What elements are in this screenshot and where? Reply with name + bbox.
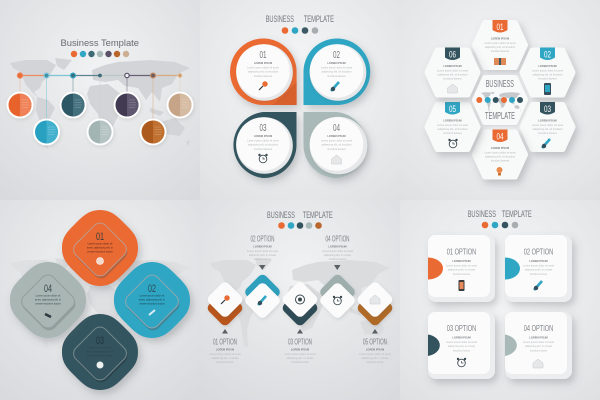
hexagon 02: Lorem ipsum dolor sit amet xyxy=(532,68,563,72)
colour dots xyxy=(482,222,518,228)
quadrant 02 xyxy=(304,38,370,105)
quadrant 04: Lorem ipsum dolor sit amet xyxy=(321,138,352,142)
card 04: adipiscing elit, in ornare xyxy=(525,344,553,348)
option 05: Lorem ipsum dolor sit amet xyxy=(359,352,391,356)
quadrant 03: 03 xyxy=(260,123,267,134)
panel: options background xyxy=(200,200,400,400)
diamond 03: Lorem ipsum dolor sit xyxy=(88,346,113,350)
card 01: tincidunt luctus xyxy=(453,272,471,276)
panel: quadrant infographic xyxy=(230,14,370,178)
hexagon 06: 06 xyxy=(449,50,456,60)
card 03: 03 OPTION xyxy=(447,324,476,333)
hexagon 01: tincidunt laoreet xyxy=(491,49,509,53)
hexagon 04: adipiscing elit, sit tincidunt xyxy=(485,154,515,158)
hexagon 05: tincidunt laoreet xyxy=(443,131,462,135)
quadrant 03 xyxy=(233,112,296,178)
quadrant 01: adipiscing elit, sit tincidunt xyxy=(248,70,278,74)
card 04: 04 OPTION xyxy=(524,324,553,333)
option 04: LOREM IPSUM xyxy=(328,244,347,248)
title: TEMPLATE xyxy=(304,14,334,25)
timeline line with nodes xyxy=(17,73,182,120)
colour dots xyxy=(278,222,322,229)
quadrant 01: tincidunt laoreet xyxy=(254,74,272,78)
quadrant 04: tincidunt laoreet xyxy=(327,147,346,151)
card 01: LOREM IPSUM xyxy=(452,259,471,263)
option 04: 04 OPTION xyxy=(326,234,350,244)
diamond 04: 04 xyxy=(44,283,52,295)
card 02: tincidunt luctus xyxy=(530,272,548,276)
diamond 04: amet, adipiscing elit, in xyxy=(35,298,62,302)
option 03: tincidunt luctus xyxy=(291,360,309,364)
quadrant 04: LOREM IPSUM xyxy=(327,134,346,138)
panel: rounded diamonds infographic xyxy=(10,210,190,390)
panel: timeline background xyxy=(0,0,200,200)
quadrant 01: LOREM IPSUM xyxy=(254,61,272,65)
card 02: Lorem ipsum dolor sit amet xyxy=(523,264,554,268)
quadrant 04: adipiscing elit, sit tincidunt xyxy=(322,142,352,146)
quadrant 02: 02 xyxy=(333,50,340,61)
option 03: 03 OPTION xyxy=(288,338,312,346)
world map xyxy=(210,258,390,348)
hexagon 04 xyxy=(475,130,525,176)
colour dots xyxy=(71,51,129,57)
hexagon 05: LOREM IPSUM xyxy=(443,118,462,122)
diamond 02: ornare tincidunt luctus xyxy=(139,302,165,306)
option 04: adipiscing elit, in ornare xyxy=(324,253,352,257)
diamond 03: amet, adipiscing elit, in xyxy=(87,350,114,354)
option 05: 05 OPTION xyxy=(363,338,387,346)
option 04: Lorem ipsum dolor sit amet xyxy=(322,249,353,253)
card 02: LOREM IPSUM xyxy=(529,259,548,263)
diamond 02: 02 xyxy=(148,283,156,295)
title: BUSINESS xyxy=(468,209,496,220)
hexagon 06: adipiscing elit, sit tincidunt xyxy=(438,72,468,76)
hexagon 01: Lorem ipsum dolor sit amet xyxy=(484,41,516,45)
world map xyxy=(10,58,190,148)
option 05: LOREM IPSUM xyxy=(366,348,384,352)
option 02: 02 OPTION xyxy=(250,234,275,244)
card 04: Lorem ipsum dolor sit amet xyxy=(523,340,554,344)
panel: hexagon background xyxy=(400,0,600,200)
panel: options infographic xyxy=(206,210,394,364)
hexagon 05: adipiscing elit, sit tincidunt xyxy=(438,127,468,131)
quadrant 02: adipiscing elit, sit tincidunt xyxy=(322,70,352,74)
hexagon 03: tincidunt laoreet xyxy=(538,131,557,135)
hexagon 01: 01 xyxy=(496,22,504,32)
hexagon 01: adipiscing elit, sit tincidunt xyxy=(485,45,515,49)
option 01: LOREM IPSUM xyxy=(216,348,234,352)
card 02 xyxy=(505,235,572,302)
hexagon 03: adipiscing elit, sit tincidunt xyxy=(532,127,563,131)
quadrant 04: 04 xyxy=(333,123,340,134)
diamond 03: 03 xyxy=(96,335,104,347)
diamond 03 xyxy=(62,314,138,390)
quadrant 01 xyxy=(230,38,297,105)
option 03: adipiscing elit, in ornare xyxy=(286,356,314,360)
option 02: LOREM IPSUM xyxy=(253,244,272,248)
hexagon 05: 05 xyxy=(449,104,456,114)
option 04: tincidunt luctus xyxy=(329,257,347,261)
hexagon 05: Lorem ipsum dolor sit amet xyxy=(437,123,468,127)
panel: option cards infographic xyxy=(428,209,572,379)
option 02: Lorem ipsum dolor sit amet xyxy=(247,249,278,253)
hexagon 02: adipiscing elit, sit tincidunt xyxy=(532,72,563,76)
panel: diamonds background xyxy=(0,200,200,400)
diamond 02 xyxy=(114,262,190,338)
centre hexagon: TEMPLATE xyxy=(485,111,515,122)
hexagon 03 xyxy=(522,102,572,149)
card 03 xyxy=(428,312,495,379)
hexagon 03: 03 xyxy=(544,104,551,114)
diamond 01: ornare tincidunt luctus xyxy=(87,250,113,254)
hexagon 03: LOREM IPSUM xyxy=(538,118,557,122)
hexagon 01 xyxy=(475,20,525,67)
quadrant 02: LOREM IPSUM xyxy=(327,61,346,65)
card 03: tincidunt luctus xyxy=(453,348,471,352)
quadrant 01: 01 xyxy=(260,50,267,61)
world map xyxy=(10,258,190,348)
card 01 xyxy=(428,235,495,302)
card 02: adipiscing elit, in ornare xyxy=(525,268,553,272)
diamond 04: ornare tincidunt luctus xyxy=(35,302,61,306)
quadrant 03: tincidunt laoreet xyxy=(254,147,272,151)
title: Business Template xyxy=(60,38,139,49)
hexagon 04: 04 xyxy=(496,132,504,142)
hexagon 04: Lorem ipsum dolor sit amet xyxy=(484,150,516,154)
hexagon 04: LOREM IPSUM xyxy=(491,146,509,150)
hexagon 04: tincidunt laoreet xyxy=(491,158,509,162)
hexagon 02: tincidunt laoreet xyxy=(538,76,557,80)
timeline circles xyxy=(6,92,194,146)
diamond 04 xyxy=(10,262,86,338)
panel: timeline infographic xyxy=(6,38,194,148)
quadrant 02: Lorem ipsum dolor sit amet xyxy=(321,66,352,70)
option 03: LOREM IPSUM xyxy=(291,348,309,352)
option 02: tincidunt luctus xyxy=(254,257,272,261)
centre hexagon: BUSINESS xyxy=(486,79,514,90)
card 03: LOREM IPSUM xyxy=(452,336,471,340)
card 01: Lorem ipsum dolor sit amet xyxy=(446,264,477,268)
option 04 xyxy=(318,234,357,320)
diamond 01: amet, adipiscing elit, in xyxy=(87,246,114,250)
option 01: 01 OPTION xyxy=(213,338,237,346)
diamond 01 xyxy=(62,210,138,286)
title: TEMPLATE xyxy=(303,210,333,221)
card 04: tincidunt luctus xyxy=(530,348,548,352)
option 03 xyxy=(281,280,319,364)
hexagon 02 xyxy=(522,48,572,95)
title: TEMPLATE xyxy=(502,209,532,220)
hexagon 02: LOREM IPSUM xyxy=(538,64,557,68)
title: BUSINESS xyxy=(267,210,295,221)
quadrant 03: adipiscing elit, sit tincidunt xyxy=(248,142,278,146)
option 01: tincidunt luctus xyxy=(216,360,234,364)
option 05: tincidunt luctus xyxy=(366,360,384,364)
option 02 xyxy=(243,234,282,320)
diamond 04: Lorem ipsum dolor sit xyxy=(36,294,61,298)
centre hexagon xyxy=(475,78,525,122)
quadrant 03: LOREM IPSUM xyxy=(254,134,272,138)
hexagon 05 xyxy=(428,102,478,149)
option 05 xyxy=(356,280,394,364)
quadrant 03: Lorem ipsum dolor sit amet xyxy=(247,138,279,142)
title: BUSINESS xyxy=(266,14,294,25)
option 02: adipiscing elit, in ornare xyxy=(249,253,277,257)
card 04: LOREM IPSUM xyxy=(529,336,548,340)
option 01: Lorem ipsum dolor sit amet xyxy=(209,352,241,356)
colour dots xyxy=(282,27,318,34)
option 03: Lorem ipsum dolor sit amet xyxy=(284,352,316,356)
panel: quadrant background xyxy=(200,0,400,200)
panel: cards background xyxy=(400,200,600,400)
quadrant 02: tincidunt laoreet xyxy=(327,74,346,78)
card 02: 02 OPTION xyxy=(524,248,553,256)
diamond 01: 01 xyxy=(96,231,104,243)
option 01: adipiscing elit, in ornare xyxy=(211,356,239,360)
diamond 02: amet, adipiscing elit, in xyxy=(139,298,166,302)
card 03: Lorem ipsum dolor sit amet xyxy=(446,340,477,344)
hexagon 03: Lorem ipsum dolor sit amet xyxy=(532,123,563,127)
card 04 xyxy=(505,312,572,379)
card 03: adipiscing elit, in ornare xyxy=(448,344,476,348)
card 01: 01 OPTION xyxy=(447,248,476,256)
card 01: adipiscing elit, in ornare xyxy=(448,268,476,272)
diamond 02: Lorem ipsum dolor sit xyxy=(140,294,165,298)
diamond 01: Lorem ipsum dolor sit xyxy=(88,242,113,246)
option 05: adipiscing elit, in ornare xyxy=(361,356,389,360)
option 01 xyxy=(206,280,244,364)
hexagon 06 xyxy=(428,48,478,94)
hexagon 06: LOREM IPSUM xyxy=(443,64,462,68)
hexagon 06: tincidunt laoreet xyxy=(443,76,462,80)
hexagon 01: LOREM IPSUM xyxy=(491,36,509,40)
hexagon 06: Lorem ipsum dolor sit amet xyxy=(437,68,468,72)
hexagon 02: 02 xyxy=(544,50,551,60)
panel: hexagon infographic xyxy=(428,20,572,176)
quadrant 04 xyxy=(304,112,367,178)
diamond 03: ornare tincidunt luctus xyxy=(87,354,113,358)
quadrant 01: Lorem ipsum dolor sit amet xyxy=(247,66,279,70)
